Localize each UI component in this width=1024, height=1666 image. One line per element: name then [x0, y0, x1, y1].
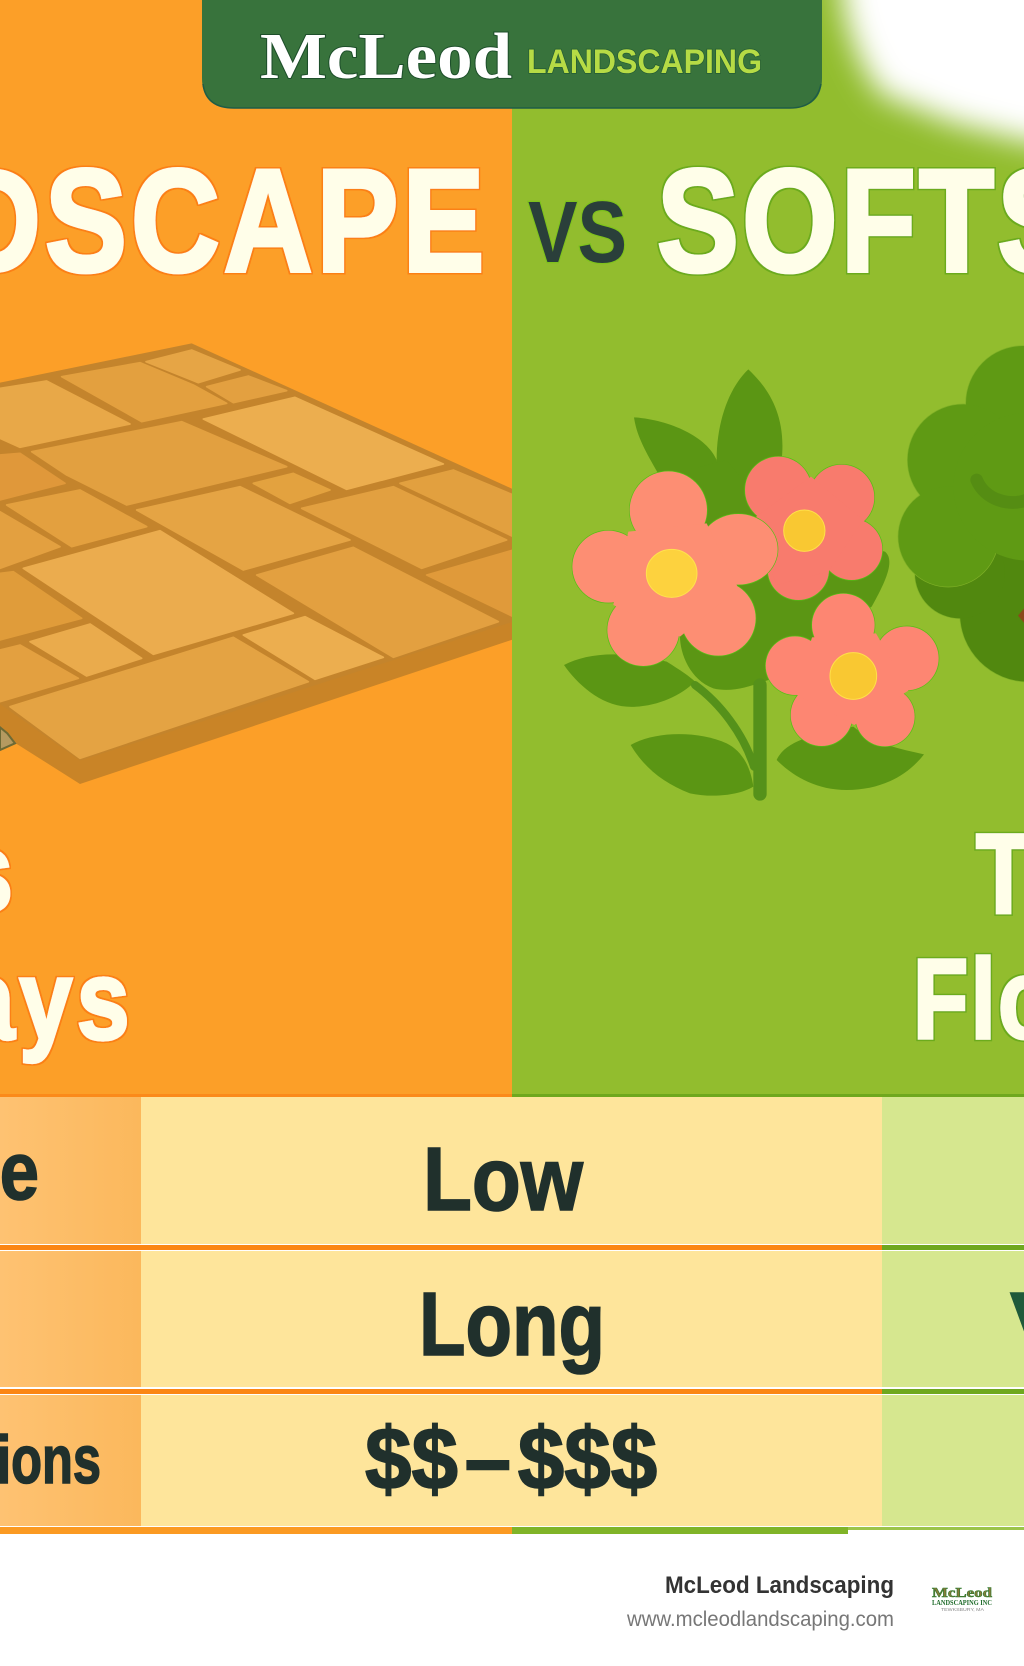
footer url: www.mcleodlandscaping.com [626, 1608, 894, 1631]
illustration: flowers [564, 369, 939, 796]
logo word: LANDSCAPING: LANDSCAPING [527, 43, 762, 81]
row divider 1 [0, 1245, 882, 1250]
row 1: maintenance: Low [423, 1130, 584, 1230]
comparison table [0, 1094, 1024, 1534]
logo word: McLeod: McLeod [260, 20, 512, 93]
tree upper canopy [898, 346, 1024, 587]
footer logo: McLeod [932, 1586, 992, 1601]
footer logo [932, 1586, 992, 1612]
stems [695, 685, 760, 794]
flower: upper right [745, 457, 882, 600]
row 2: lifespan: Long [419, 1275, 605, 1375]
illustration: stone patio [0, 343, 513, 784]
row divider 2 [0, 1389, 882, 1394]
heading: vs: VS [528, 184, 627, 281]
tree trunk [1018, 607, 1024, 624]
header banner [202, 0, 822, 108]
row 3: price options [0, 1395, 1024, 1526]
panel: hardscape background [0, 0, 512, 1097]
row 1: maintenance [0, 1097, 1024, 1244]
blurred white corner [838, 0, 1024, 150]
footer logo: TEWKSBURY, MA [941, 1607, 984, 1612]
row 2: lifespan [0, 1251, 1024, 1387]
flower: lower right [766, 594, 939, 746]
footer logo: LANDSCAPING INC [932, 1599, 992, 1607]
row 3: price options: $$–$$$ [365, 1410, 657, 1508]
path stone [0, 727, 15, 750]
patio grout base [0, 343, 513, 761]
leaves [564, 369, 924, 796]
tree lower canopy [915, 528, 1024, 682]
illustration: tree [898, 346, 1024, 682]
flower: large left [572, 471, 778, 666]
panel: softscape background [512, 0, 1024, 1097]
patio paving stones [0, 350, 513, 758]
footer brand name: McLeod Landscaping [665, 1572, 894, 1599]
table bottom strip [0, 1527, 512, 1534]
tree branch shadow [977, 480, 1024, 502]
patio side slab [0, 620, 513, 784]
table top border [0, 1094, 512, 1097]
